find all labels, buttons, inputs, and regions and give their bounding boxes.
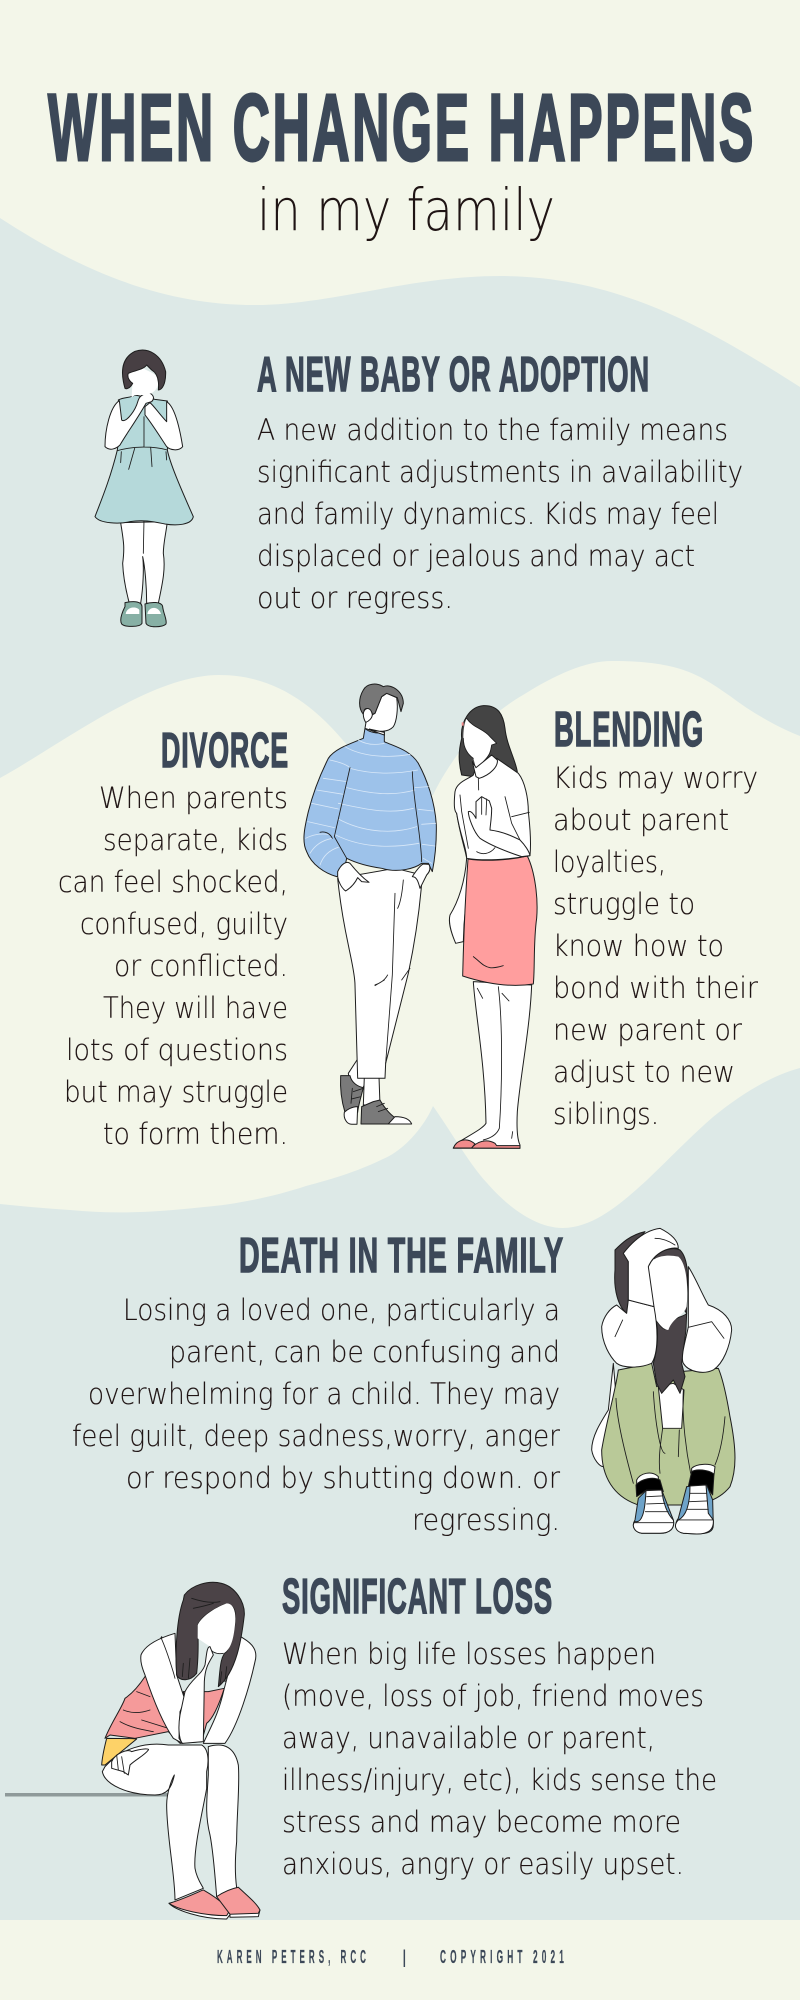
text: divorce: confused, guilty — [80, 907, 288, 941]
text: divorce: When parents — [99, 781, 288, 815]
text: divorce: or conflicted. — [114, 949, 288, 983]
icon: girl in blue dress — [95, 350, 193, 627]
text: significant loss: illness/injury, etc), kids sense the — [282, 1763, 717, 1797]
text: significant loss: (move, loss of job, friend moves — [282, 1679, 704, 1713]
text: significant loss — [282, 1637, 717, 1881]
text: divorce: separate, kids — [103, 823, 288, 857]
text: blending — [553, 761, 758, 1131]
background: cream blob behind divorce and blending — [0, 661, 800, 1228]
text: COPYRIGHT 2021 — [440, 1947, 568, 1967]
text: blending: know how to — [553, 929, 724, 963]
text: divorce: lots of questions — [66, 1033, 288, 1067]
panel: blending — [553, 703, 758, 1131]
text: blending: adjust to new — [553, 1055, 735, 1089]
text: a new baby: and family dynamics. Kids may feel — [257, 497, 719, 531]
text: a new baby: significant adjustments in availability — [257, 455, 743, 489]
footer: | — [402, 1947, 407, 1967]
icon: woman in pink skirt — [449, 706, 537, 1148]
text: significant loss: away, unavailable or parent, — [282, 1721, 655, 1755]
text: significant loss: stress and may become more — [282, 1805, 681, 1839]
text: blending: struggle to — [553, 887, 695, 921]
text: death in the family — [72, 1293, 560, 1537]
title — [48, 75, 756, 244]
text: death in the family: parent, can be confusing and — [169, 1335, 560, 1369]
icon: ledge line — [5, 1793, 170, 1796]
panel: death in the family — [72, 1229, 564, 1537]
text: death in the family: feel guilt, deep sadness,worry, anger — [72, 1419, 560, 1453]
title: in my family — [257, 176, 555, 244]
icon: man in blue sweater — [304, 684, 436, 1124]
text: divorce: can feel shocked, — [58, 865, 288, 899]
footer: KAREN PETERS, RCC — [217, 1947, 370, 1967]
text: divorce — [58, 781, 288, 1151]
text: a new baby: A new addition to the family means — [257, 413, 728, 447]
text: blending: siblings. — [553, 1097, 659, 1131]
text: divorce: They will have — [103, 991, 288, 1025]
text: blending: Kids may worry — [553, 761, 758, 795]
icon: crouching girl holding head — [592, 1228, 735, 1534]
icon: seated girl with head on hand — [102, 1582, 260, 1919]
text: significant loss: When big life losses happen — [282, 1637, 656, 1671]
text: death in the family: regressing. — [412, 1503, 560, 1537]
panel: a new baby or adoption — [257, 348, 743, 615]
text: divorce: to form them. — [103, 1117, 288, 1151]
heading: significant loss: SIGNIFICANT LOSS — [282, 1570, 553, 1624]
text: death in the family: Losing a loved one, particularly a — [123, 1293, 560, 1327]
text: significant loss: anxious, angry or easily upset. — [282, 1847, 684, 1881]
text: blending: about parent — [553, 803, 729, 837]
text: death in the family: overwhelming for a child. They may — [88, 1377, 560, 1411]
text: blending: bond with their — [553, 971, 758, 1005]
panel: divorce — [58, 724, 289, 1151]
text: blending: new parent or — [553, 1013, 742, 1047]
text: death in the family: or respond by shutting down. or — [126, 1461, 560, 1495]
heading: divorce: DIVORCE — [161, 724, 289, 778]
text: a new baby — [257, 413, 743, 615]
text: a new baby: displaced or jealous and may act — [257, 539, 695, 573]
text: a new baby: out or regress. — [257, 581, 453, 615]
text: blending: loyalties, — [553, 845, 666, 879]
panel: significant loss — [282, 1570, 717, 1881]
heading: death in the family: DEATH IN THE FAMILY — [239, 1229, 564, 1283]
text: divorce: but may struggle — [64, 1075, 288, 1109]
